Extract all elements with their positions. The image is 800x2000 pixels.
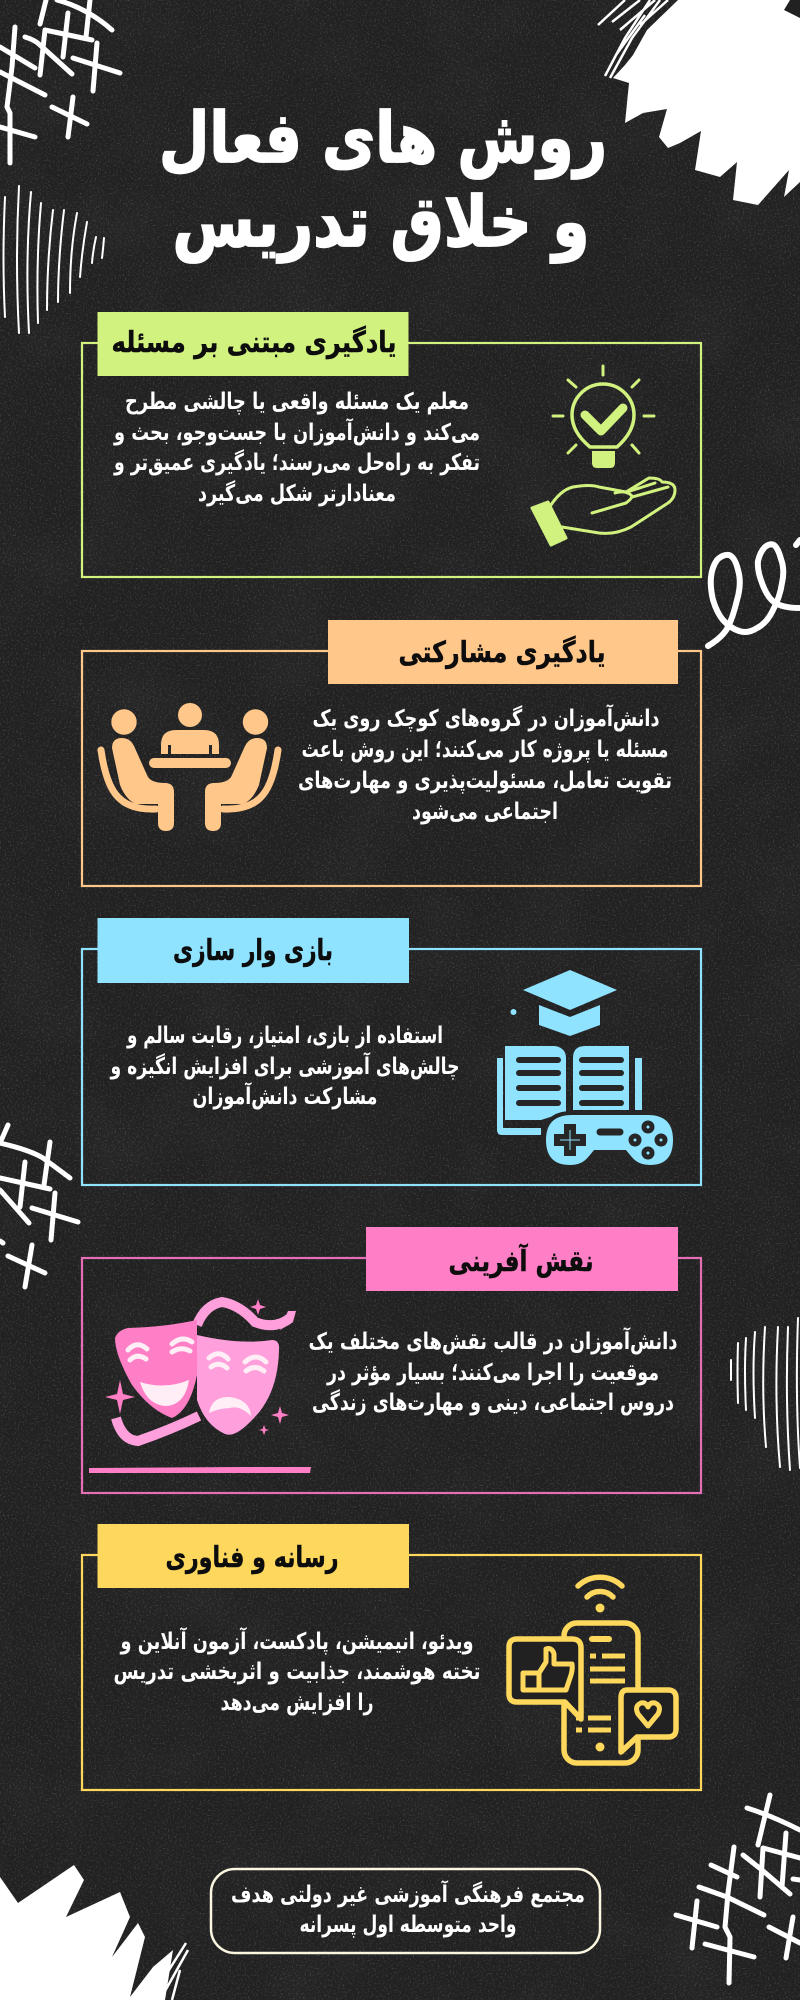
panel: collaborative learning — [82, 620, 701, 886]
decoration: hatch lines right — [731, 1318, 800, 1470]
footer: school name: مجتمع فرهنگی آموزشی غیر دولتی هدف — [231, 1879, 585, 1908]
decoration: crosshatch bottom right — [676, 1795, 800, 1983]
icon: phone with like and heart bubbles — [509, 1577, 676, 1763]
text: media description — [114, 1626, 480, 1716]
title: و خلاق تدریس — [172, 181, 590, 263]
panel: role play — [82, 1227, 701, 1493]
decoration: crosshatch top left — [0, 0, 120, 163]
text: gamification description: استفاده از بازی، امتیاز، رقابت سالم و — [126, 1023, 443, 1049]
panel: gamification — [82, 918, 701, 1185]
text: gamification description — [110, 1023, 460, 1110]
text: collaborative description: مسئله یا پروژه کار می‌کنند؛ این روش باعث — [302, 737, 668, 763]
text: collaborative description: تقویت تعامل، مسئولیت‌پذیری و مهارت‌های — [298, 768, 672, 794]
text: role play description: دانش‌آموزان در قالب نقش‌های مختلف یک — [308, 1326, 678, 1355]
heading: media and technology: رسانه و فناوری — [166, 1540, 338, 1574]
title — [159, 97, 607, 263]
icon: theatre masks — [105, 1299, 296, 1441]
footer: school name: واحد متوسطه اول پسرانه — [300, 1912, 516, 1938]
icon: light bulb over hand — [532, 366, 675, 545]
heading: gamification: بازی وار سازی — [173, 933, 333, 967]
text: role play description: موقعیت را اجرا می‌کنند؛ بسیار مؤثر در — [326, 1360, 659, 1386]
text: gamification description: چالش‌های آموزشی برای افزایش انگیزه و — [110, 1051, 460, 1080]
heading: collaborative learning — [328, 620, 678, 684]
text: media description: تخته هوشمند، جذابیت و اثربخشی تدریس — [114, 1659, 480, 1685]
text: collaborative description — [298, 703, 672, 825]
heading: problem-based learning: یادگیری مبتنی بر مسئله — [112, 325, 396, 359]
heading: role play — [366, 1227, 678, 1291]
decoration: white brush bottom left — [0, 1865, 188, 2000]
text: problem-based description: معنادارتر شکل می‌گیرد — [198, 480, 396, 507]
heading: collaborative learning: یادگیری مشارکتی — [398, 635, 606, 669]
text: collaborative description: اجتماعی می‌شود — [412, 799, 558, 825]
heading: gamification — [98, 918, 409, 983]
title: روش های فعال — [159, 97, 607, 179]
text: role play description — [308, 1326, 678, 1416]
decoration: loop squiggle right — [708, 540, 800, 646]
text: problem-based description: تفکر به راه‌حل می‌رسند؛ یادگیری عمیق‌تر و — [113, 449, 480, 476]
text: media description: ویدئو، انیمیشن، پادکست، آزمون آنلاین و — [120, 1626, 474, 1655]
heading: problem-based learning — [98, 312, 408, 376]
icon: cap, book and gamepad — [497, 970, 675, 1167]
decoration: pink brush line — [89, 1467, 311, 1473]
text: gamification description: مشارکت دانش‌آموزان — [192, 1081, 378, 1110]
text: problem-based description: معلم یک مسئله واقعی یا چالشی مطرح — [125, 389, 469, 415]
panel: problem-based learning — [82, 312, 701, 577]
text: collaborative description: دانش‌آموزان در گروه‌های کوچک روی یک — [312, 703, 660, 732]
heading: media and technology — [98, 1524, 409, 1588]
decoration: hatch lines top left — [4, 186, 104, 333]
text: role play description: دروس اجتماعی، دینی و مهارت‌های زندگی — [312, 1389, 674, 1416]
decoration: crosshatch middle left — [0, 1125, 78, 1287]
text: problem-based description — [113, 389, 480, 507]
decoration: white brush top right — [598, 0, 800, 205]
footer: school name — [211, 1869, 600, 1953]
heading: role play: نقش آفرینی — [448, 1243, 594, 1278]
text: problem-based description: می‌کند و دانش‌آموزان با جست‌وجو، بحث و — [113, 417, 480, 446]
icon: people around table — [101, 703, 278, 831]
text: media description: را افزایش می‌دهد — [220, 1690, 374, 1716]
panel: media and technology — [82, 1524, 701, 1790]
